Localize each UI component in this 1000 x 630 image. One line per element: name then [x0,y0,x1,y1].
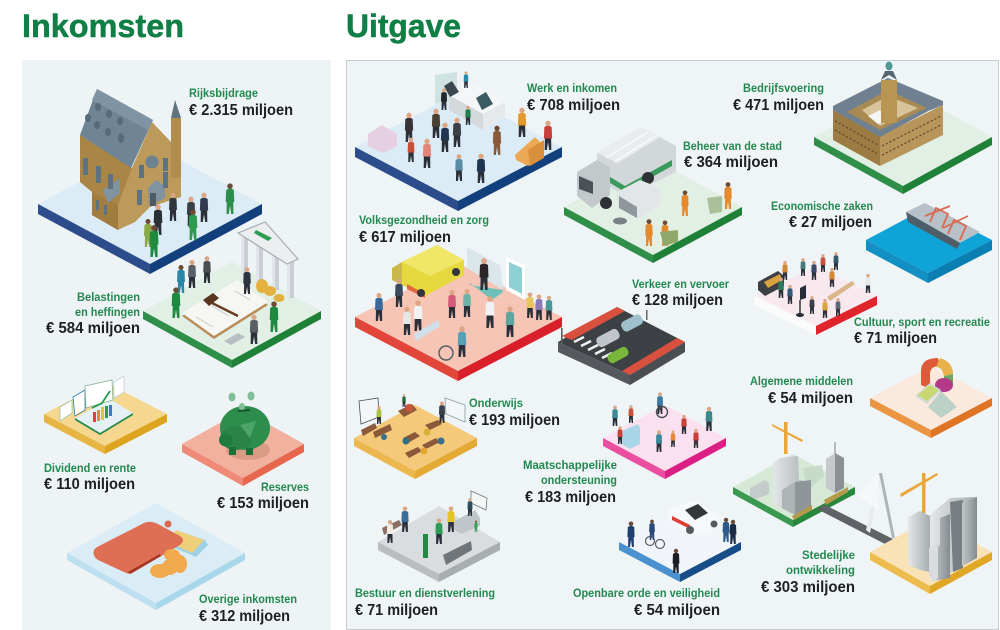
platform: Openbare orde [619,510,741,582]
label: Algemene middelen: Algemene middelen [750,376,853,388]
label: Belastingen en heffingen: € 584 miljoen [46,320,140,337]
illustration: piggy bank [219,392,270,460]
illustration: wallet and coins [94,520,208,578]
label: Onderwijs: Onderwijs [469,398,523,410]
platform: Beheer [564,159,742,263]
illustration: road with cars and crosswalk [561,310,648,365]
platform: Dividend [44,382,167,454]
label: Beheer van de stad: Beheer van de stad [683,141,782,153]
item: Rijksbijdrage [38,88,293,274]
label: Stedelijke ontwikkeling [761,550,855,596]
illustration: service desk [382,491,487,565]
panel: Uitgave [346,60,998,630]
label: Verkeer en vervoer: € 128 miljoen [632,292,723,309]
label: Cultuur, sport en recreatie [854,317,990,347]
label: Onderwijs: € 193 miljoen [469,412,560,429]
platform: Economische zaken [866,207,992,283]
item: Bestuur en dienstverlening [355,491,500,619]
platform: Cultuur [755,266,877,335]
platform: Stedelijke B [870,518,992,594]
illustration: garbage truck and sweeper [577,127,732,246]
illustration: skyscrapers with crane [900,473,977,581]
label: Bedrijfsvoering: Bedrijfsvoering [743,83,824,95]
label: Volksgezondheid en zorg: € 617 miljoen [359,229,451,246]
label: Rijksbijdrage: Rijksbijdrage [189,88,258,100]
label: Dividend en rente [44,463,136,493]
label: Maatschappelijke ondersteuning: ondersteuning [541,475,617,487]
platform: Algemene middelen [870,366,992,438]
label: Economische zaken: Economische zaken [771,201,873,213]
item: Volksgezondheid en zorg [355,215,562,381]
label: Economische zaken [771,201,873,231]
people: Rijksbijdrage [144,183,234,257]
label: Rijksbijdrage: € 2.315 miljoen [189,102,293,119]
label: Dividend en rente: Dividend en rente [44,463,136,475]
title: Uitgave: Uitgave [346,8,461,44]
label: Belastingen en heffingen: en heffingen [75,307,140,319]
item: Beheer van de stad [564,127,782,263]
label: Openbare orde en veiligheid [573,588,720,619]
label: Overige inkomsten [199,594,297,625]
item: Onderwijs [354,394,560,479]
label: Economische zaken: € 27 miljoen [789,214,872,231]
label: Openbare orde en veiligheid: € 54 miljoen [634,602,720,619]
platform: Belastingen [143,262,321,368]
label: Overige inkomsten: € 312 miljoen [199,608,290,625]
label: Volksgezondheid en zorg: Volksgezondheid en zorg [359,215,489,227]
label: Bestuur en dienstverlening: € 71 miljoen [355,602,438,619]
item: Reserves [182,392,309,512]
label: Overige inkomsten: Overige inkomsten [199,594,297,606]
platform: Bestuur [378,506,500,582]
label: Rijksbijdrage [189,88,293,119]
label: Bedrijfsvoering [733,83,824,114]
item: Overige inkomsten [67,503,297,625]
label: Dividend en rente: € 110 miljoen [44,476,135,493]
label: Verkeer en vervoer: Verkeer en vervoer [632,279,729,291]
illustration: towers with crane [750,422,848,520]
illustration: document, gavel and coins [172,256,284,345]
illustration: ambulance and hospital [375,245,552,360]
label: Bestuur en dienstverlening: Bestuur en dienstverlening [355,588,495,600]
platform: Bedrijfsvoering [814,88,992,194]
label: Algemene middelen [750,376,853,407]
illustration: stadhuis [833,62,943,166]
illustration: temple [238,222,298,298]
label: Reserves [217,482,309,512]
item: Belastingen en heffingen [46,222,321,368]
illustration: Ridderzaal [80,89,181,230]
label: Onderwijs [469,398,560,429]
item: Werk en inkomen [355,71,620,211]
illustration: classroom [359,394,465,458]
platform: Stedelijke A [733,454,855,527]
platform: Verkeer [558,307,685,385]
item: Openbare orde en veiligheid [573,500,741,619]
illustration: office [368,71,552,183]
label: Algemene middelen: € 54 miljoen [768,390,853,407]
panel: Inkomsten [22,60,331,630]
label: Werk en inkomen: € 708 miljoen [527,97,620,114]
item: Algemene middelen [750,358,992,438]
label: Werk en inkomen: Werk en inkomen [527,83,617,95]
label: Reserves: € 153 miljoen [217,495,309,512]
platform: Reserves [182,410,304,486]
label: Cultuur, sport en recreatie: Cultuur, sport en recreatie [854,317,990,329]
illustration: chart and laptop [915,358,957,418]
platform: Volksgezondheid [355,263,562,381]
illustration: police car and officers [627,500,736,573]
illustration: Erasmus bridge [817,473,895,545]
illustration: culture and sport [758,252,871,318]
platform: Onderwijs [354,405,477,479]
item: Bedrijfsvoering [733,62,992,194]
item: Cultuur, sport en recreatie [755,252,990,347]
label: Belastingen en heffingen: Belastingen [77,292,140,304]
label: Maatschappelijke ondersteuning: Maatschappelijke [523,460,617,472]
label: Beheer van de stad: € 364 miljoen [684,154,778,171]
label: Openbare orde en veiligheid: Openbare orde en veiligheid [573,588,720,600]
item: Economische zaken [771,201,992,283]
item: Stedelijke ontwikkeling [733,422,992,596]
label: Maatschappelijke ondersteuning: € 183 miljoen [525,489,616,506]
item: Maatschappelijke ondersteuning [523,392,726,506]
label: Stedelijke ontwikkeling: ontwikkeling [786,565,855,577]
label: Bestuur en dienstverlening [355,588,495,619]
illustration: harbour ship and cranes [906,203,980,249]
label: Volksgezondheid en zorg [359,215,489,246]
platform: Werk [355,93,562,211]
label: Verkeer en vervoer [632,279,729,309]
label: Bedrijfsvoering: € 471 miljoen [733,97,824,114]
label: Stedelijke ontwikkeling: Stedelijke [802,550,855,562]
item: Verkeer en vervoer [558,279,729,385]
illustration: social support [612,392,712,452]
platform: Rijksbijdrage [38,144,262,274]
label: Maatschappelijke ondersteuning [523,460,617,506]
illustration: charts [60,376,133,435]
label: Reserves: Reserves [261,482,309,494]
label: Werk en inkomen [527,83,620,114]
title: Inkomsten: Inkomsten [22,8,184,44]
label: Beheer van de stad [683,141,782,171]
label: Belastingen en heffingen [46,292,140,337]
label: Stedelijke ontwikkeling: € 303 miljoen [761,579,855,596]
platform: Maatschappelijk [603,405,726,479]
item: Dividend en rente [44,376,167,493]
label: Cultuur, sport en recreatie: € 71 miljoen [854,330,937,347]
platform: Overige [67,503,245,610]
